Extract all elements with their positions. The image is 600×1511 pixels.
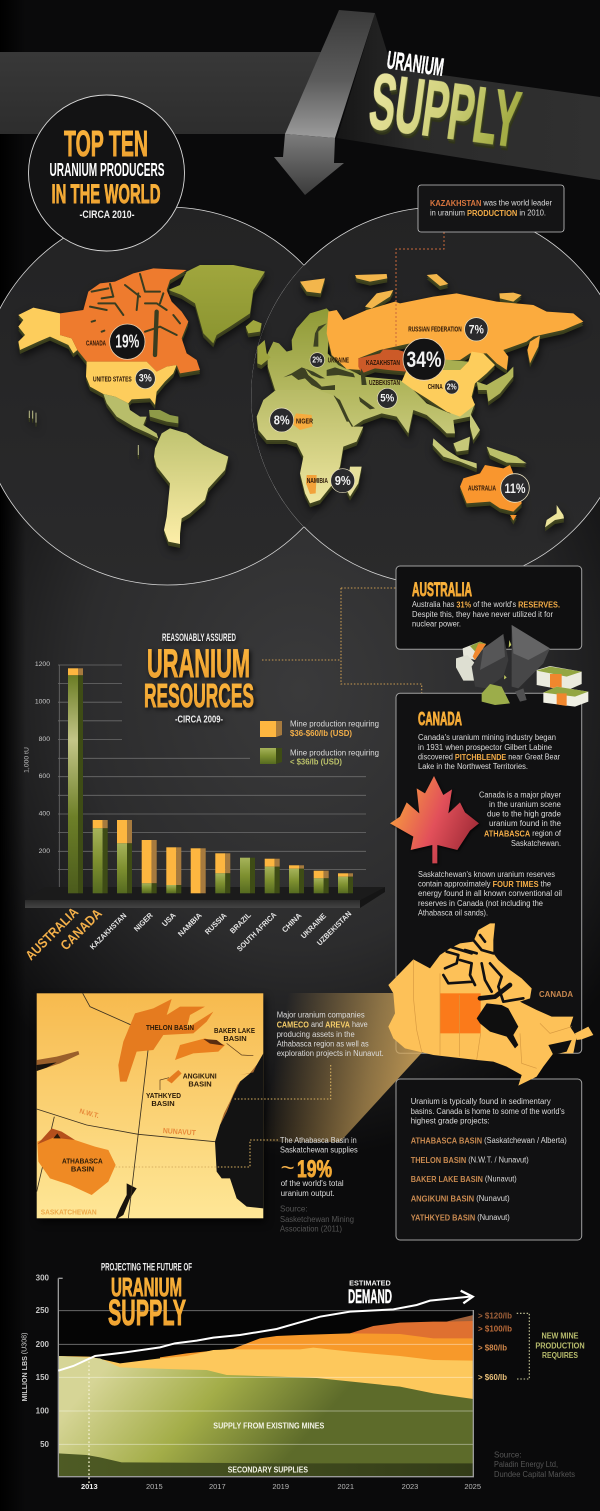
canada mainland and arctic xyxy=(388,923,577,1086)
stat: kazakhstan 34%: 34% xyxy=(406,347,442,372)
panel: canada: CANADA xyxy=(418,709,462,729)
callout: athabasca supplies 19 percent xyxy=(280,1136,358,1198)
yathkyed leader xyxy=(160,1078,169,1090)
text: companies in the athabasca region: producing assets in the xyxy=(277,1030,355,1039)
source: paladin and dundee xyxy=(494,1450,575,1479)
band: over 60 dollars xyxy=(58,1348,473,1477)
source: saskatchewan mining association xyxy=(280,1204,354,1234)
south america xyxy=(154,428,228,544)
basin: angikuni xyxy=(167,1070,182,1083)
x axis labels: 2025 xyxy=(464,1482,481,1491)
panel: canada: ATHABASCA region of xyxy=(484,829,562,838)
caribbean islands xyxy=(149,410,178,423)
country labels: SOUTH AFRICA xyxy=(235,910,279,953)
y axis labels: 1200 xyxy=(35,661,50,668)
stat: uzbekistan 5%: 5% xyxy=(380,392,394,404)
price labels xyxy=(478,1312,512,1382)
callout: kazakhstan production leader: in uranium PRODUCTION in 2010. xyxy=(430,208,546,218)
stat: ukraine 2%: 2% xyxy=(312,356,322,364)
bar: canada xyxy=(93,820,108,893)
panel: basins list: highest grade projects: xyxy=(411,1116,490,1126)
panel: basin inset map: BASIN xyxy=(71,1164,94,1174)
canadian arctic channels xyxy=(90,274,180,355)
source: saskatchewan mining association: Source: xyxy=(280,1204,308,1214)
mongolia xyxy=(433,359,468,370)
southeast asia islands xyxy=(433,413,480,468)
hudson bay coast xyxy=(215,1053,263,1208)
panel: canada: in the uranium scene xyxy=(489,800,562,809)
title: uranium supply xyxy=(365,46,525,164)
greenland xyxy=(168,265,265,343)
bracket: new mine production requires: PRODUCTION xyxy=(535,1342,585,1350)
panel: canada: Athabasca oil sands). xyxy=(418,908,488,918)
heading: reasonably assured uranium resources: REASONABLY ASSURED xyxy=(162,632,236,644)
label: estimated demand xyxy=(348,1278,392,1308)
demand line xyxy=(58,1291,473,1371)
text: companies in the athabasca region xyxy=(277,1010,384,1058)
british isles xyxy=(257,340,271,365)
rock xyxy=(472,625,550,702)
label: estimated demand: ESTIMATED xyxy=(349,1278,391,1288)
heading: projecting the future of uranium supply: URANIUM xyxy=(111,1272,182,1302)
panel: canada: discovered PITCHBLENDE near Great Bear xyxy=(418,752,560,762)
text: companies in the athabasca region: exploration projects in Nunavut. xyxy=(277,1049,384,1058)
stat: ukraine 2%: UKRAINE xyxy=(328,356,349,364)
heading: reasonably assured uranium resources: RESOURCES xyxy=(144,677,254,714)
text: companies in the athabasca region: Athabasca region as well as xyxy=(277,1040,369,1048)
bar: australia xyxy=(68,668,83,893)
panel: basins list: ANGIKUNI BASIN (Nunavut) xyxy=(411,1194,510,1203)
bracket: new mine production requires xyxy=(517,1313,585,1379)
money stack left xyxy=(456,642,486,681)
panel: canada: Saskatchewan. xyxy=(511,839,561,848)
legend: under 36 dollars: Mine production requiring xyxy=(290,748,379,758)
stat: australia 11%: 11% xyxy=(504,480,526,496)
bar: south africa xyxy=(265,859,280,893)
russian federation xyxy=(327,293,583,370)
bracket: new mine production requires: REQUIRES xyxy=(542,1351,579,1360)
panel: canada: Canada is a major player xyxy=(479,790,561,800)
stat: namibia 9% xyxy=(307,469,355,493)
y axis labels xyxy=(36,1274,50,1449)
hawaii xyxy=(29,411,138,455)
panel: canada: Saskatchewan's known uranium reserves xyxy=(418,870,555,879)
bracket: new mine production requires: NEW MINE xyxy=(542,1332,579,1340)
stat: australia 11% xyxy=(468,474,529,502)
y axis labels: 1000 xyxy=(35,698,50,706)
source: paladin and dundee: Source: xyxy=(494,1450,522,1460)
stat: uzbekistan 5% xyxy=(369,378,400,408)
y axis labels: 1,000 tU xyxy=(24,747,30,773)
callout: kazakhstan production leader xyxy=(396,185,564,347)
stat: namibia 9%: 9% xyxy=(335,473,351,488)
panel: basins list xyxy=(396,1079,582,1240)
panel: canada: Lake in the Northwest Territories. xyxy=(418,762,528,771)
source: paladin and dundee: Dundee Capital Markets xyxy=(494,1470,575,1479)
price labels: > $120/lb xyxy=(478,1312,512,1320)
band: over 120 dollars xyxy=(447,1315,473,1477)
lakes xyxy=(37,1051,79,1071)
callout: athabasca supplies 19 percent: uranium output. xyxy=(281,1189,335,1198)
area chart: projected uranium supply xyxy=(20,1274,481,1491)
niger xyxy=(292,413,312,430)
panel: australia xyxy=(396,566,582,649)
heading: reasonably assured uranium resources: -CIRCA 2009- xyxy=(175,714,223,726)
country labels: NAMBIA xyxy=(176,910,204,938)
panel: basin inset map: BASIN xyxy=(223,1034,247,1043)
y axis title: MILLION LBS (U308) xyxy=(20,1332,28,1402)
stat: niger 8% xyxy=(270,408,313,432)
map landmasses xyxy=(18,265,583,544)
bar: ukraine xyxy=(314,871,329,893)
badge: top ten producers xyxy=(28,95,184,251)
country labels: CANADA xyxy=(58,906,105,953)
stat: ukraine 2% xyxy=(310,353,349,367)
legend xyxy=(260,720,379,766)
bar: usa xyxy=(166,847,181,893)
country labels: RUSSIA xyxy=(203,911,229,936)
plot background xyxy=(58,1310,473,1477)
new zealand xyxy=(545,505,564,527)
panel: basin inset map: SASKATCHEWAN xyxy=(41,1208,97,1216)
south asia and middle east xyxy=(300,368,475,433)
stat: china 2%: CHINA xyxy=(428,382,443,391)
band: over 100 dollars xyxy=(350,1321,473,1477)
bar: uzbekistan xyxy=(338,873,353,893)
stat: canada 19%: CANADA xyxy=(86,338,106,348)
badge: top ten producers: -CIRCA 2010- xyxy=(80,209,135,221)
country labels: UKRAINE xyxy=(299,911,328,940)
madagascar xyxy=(347,467,362,497)
panel: basin inset map: BASIN xyxy=(151,1099,175,1108)
heading: reasonably assured uranium resources xyxy=(144,632,254,726)
panel: canada: in 1931 when prospector Gilbert Labine xyxy=(418,743,553,752)
panel: australia: AUSTRALIA xyxy=(412,580,472,601)
callout: athabasca supplies 19 percent: ~ xyxy=(281,1155,295,1180)
stat: russian federation 7%: 7% xyxy=(469,322,484,336)
y axis labels: 50 xyxy=(40,1440,50,1449)
source: saskatchewan mining association: Association (2011) xyxy=(280,1224,342,1234)
bar: namibia xyxy=(191,848,206,893)
china xyxy=(402,352,495,417)
icon: uranium rock and money xyxy=(456,625,588,707)
panel: basin inset map: ATHABASCA xyxy=(62,1156,103,1166)
legend: under 36 dollars: < $36/lb (USD) xyxy=(290,758,342,766)
africa xyxy=(257,383,363,503)
canada map xyxy=(388,923,593,1086)
y axis labels: 200 xyxy=(36,1340,50,1349)
country labels: CHINA xyxy=(280,911,304,934)
namibia xyxy=(306,475,317,494)
dotted connectors on inset map xyxy=(115,1065,331,1167)
panel: basins list: ATHABASCA BASIN (Saskatchewan / Alberta) xyxy=(411,1136,567,1145)
stat: kazakhstan 34%: KAZAKHSTAN xyxy=(366,358,400,367)
x axis labels: 2013 xyxy=(81,1482,98,1491)
arctic islands xyxy=(300,274,522,308)
stat: kazakhstan 34% xyxy=(366,338,445,380)
panel: canada: contain approximately FOUR TIMES the xyxy=(418,880,552,888)
arctic channels xyxy=(443,935,523,1002)
bar: niger xyxy=(142,840,157,893)
country labels: KAZAKHSTAN xyxy=(88,911,128,951)
secondary supplies label: SECONDARY SUPPLIES xyxy=(228,1466,309,1474)
europe xyxy=(268,308,362,390)
country labels: USA xyxy=(160,910,178,928)
european seas xyxy=(283,323,375,422)
band: secondary supplies xyxy=(58,1453,473,1477)
newfoundland xyxy=(575,1027,593,1040)
x axis labels: 2023 xyxy=(402,1482,418,1491)
text: companies in the athabasca region: CAMECO and AREVA have xyxy=(277,1020,368,1029)
stat: uzbekistan 5%: UZBEKISTAN xyxy=(369,378,400,387)
band: supply from existing mines xyxy=(58,1356,473,1477)
panel: canada: reserves in Canada (not including the xyxy=(418,899,544,908)
y axis labels: 800 xyxy=(39,736,50,743)
y axis labels: 300 xyxy=(36,1274,50,1282)
panel: basin inset map xyxy=(37,993,263,1220)
y axis labels: 400 xyxy=(39,810,50,818)
panel: basins list: Uranium is typically found in sedimentary xyxy=(411,1097,551,1106)
north america: mexico and central america xyxy=(103,394,158,438)
header ribbon and arrow xyxy=(0,10,600,195)
axes xyxy=(58,1278,473,1477)
stat: china 2%: 2% xyxy=(447,382,457,392)
panel: basin inset map: NUNAVUT xyxy=(163,1126,196,1137)
country labels: BRAZIL xyxy=(228,910,253,935)
x axis labels xyxy=(81,1482,481,1491)
country labels xyxy=(23,904,353,963)
price labels: > $100/lb xyxy=(478,1324,512,1334)
stat: niger 8%: NIGER xyxy=(296,416,313,426)
country labels: AUSTRALIA xyxy=(23,904,81,963)
y axis labels: 200 xyxy=(39,848,50,855)
x axis labels: 2015 xyxy=(146,1482,163,1491)
panel: basins list: YATHKYED BASIN (Nunavut) xyxy=(411,1213,510,1222)
stat: canada 19%: 19% xyxy=(115,332,139,352)
province borders xyxy=(413,960,572,1068)
price labels: > $60/lb xyxy=(478,1373,507,1382)
iceland xyxy=(246,320,262,333)
title: uranium supply: URANIUM xyxy=(385,46,446,82)
panel: basin inset map: YATHKYED xyxy=(146,1091,182,1100)
bar chart: uranium resources by country xyxy=(23,661,385,963)
north america: united states xyxy=(86,362,177,405)
panel: basin inset map: THELON BASIN xyxy=(146,1023,194,1032)
panel: basin inset map: BASIN xyxy=(188,1080,212,1088)
legend: 36 to 60 dollars: Mine production requiring xyxy=(290,720,379,728)
stat: canada 19% xyxy=(86,324,145,359)
hudson bay xyxy=(477,1003,518,1048)
panel: canada: energy found in all known conventional oil xyxy=(418,889,562,898)
label: estimated demand: DEMAND xyxy=(348,1287,392,1308)
stat: russian federation 7%: RUSSIAN FEDERATION xyxy=(408,324,462,334)
icon: maple leaf xyxy=(390,776,479,863)
text: companies in the athabasca region: Major uranium companies xyxy=(277,1010,365,1020)
money stack right xyxy=(537,666,588,707)
2013 marker xyxy=(87,1357,91,1483)
country labels: NIGER xyxy=(132,910,155,933)
x axis labels: 2019 xyxy=(272,1482,289,1491)
bar: russia xyxy=(215,853,230,893)
x axis labels: 2021 xyxy=(337,1482,354,1491)
kazakhstan xyxy=(358,349,410,373)
panel: basins list: BAKER LAKE BASIN (Nunavut) xyxy=(411,1174,517,1184)
source: paladin and dundee: Paladin Energy Ltd, xyxy=(494,1460,558,1469)
new guinea xyxy=(487,447,527,463)
panel: australia: Despite this, they have never utilized it for xyxy=(412,610,553,619)
y axis labels: 150 xyxy=(36,1373,50,1382)
y axis labels: 600 xyxy=(39,773,50,780)
kamchatka xyxy=(527,336,540,363)
stat: namibia 9%: NAMIBIA xyxy=(307,476,328,485)
basin: thelon xyxy=(118,999,213,1082)
basin: athabasca xyxy=(37,1128,116,1195)
grid lines xyxy=(58,1311,473,1444)
badge: top ten producers: IN THE WORLD xyxy=(52,179,160,209)
heading: projecting the future of uranium supply: PROJECTING THE FUTURE OF xyxy=(101,1262,192,1274)
legend: 36 to 60 dollars: $36-$60/lb (USD) xyxy=(290,729,352,738)
y axis labels: 100 xyxy=(36,1406,50,1416)
green ore chunk xyxy=(482,684,510,705)
country labels: UZBEKISTAN xyxy=(315,909,353,947)
basin: baker lake xyxy=(175,1038,253,1060)
chart axis and grid xyxy=(58,665,366,887)
stat: united states 3%: 3% xyxy=(139,373,152,385)
y axis labels xyxy=(24,661,50,855)
panel: australia: nuclear power. xyxy=(412,620,461,628)
label: canada on map: CANADA xyxy=(539,989,573,999)
stat: russian federation 7% xyxy=(408,318,488,341)
bar: china xyxy=(289,865,304,893)
gulf of st lawrence xyxy=(548,1040,572,1055)
callout: athabasca supplies 19 percent: Saskatchewan supplies xyxy=(280,1146,358,1154)
panel: basin inset map: BAKER LAKE xyxy=(214,1026,255,1035)
panel: basin inset map: ANGIKUNI xyxy=(183,1072,217,1080)
bar: kazakhstan xyxy=(117,820,132,893)
band labels: SUPPLY FROM EXISTING MINES xyxy=(213,1422,325,1430)
panel: canada xyxy=(396,693,582,1053)
north america: alaska xyxy=(18,308,77,353)
tasmania xyxy=(510,515,517,521)
heading: projecting the future of uranium supply xyxy=(101,1262,192,1333)
stat: australia 11%: AUSTRALIA xyxy=(468,484,496,492)
legend: under 36 dollars xyxy=(260,748,379,766)
bar: brazil xyxy=(240,858,255,893)
japan and korea xyxy=(477,367,513,402)
badge: top ten producers: TOP TEN xyxy=(64,123,148,164)
callout: athabasca supplies 19 percent: The Athabasca Basin in xyxy=(280,1136,357,1145)
x axis labels: 2017 xyxy=(209,1482,226,1491)
stat: china 2% xyxy=(428,380,459,394)
world map lobes xyxy=(0,207,600,585)
y axis labels: 250 xyxy=(36,1306,50,1315)
panel: australia: Australia has 31% of the world's RESERVES. xyxy=(412,600,560,609)
stat: united states 3%: UNITED STATES xyxy=(93,374,132,384)
north america: canada xyxy=(60,268,200,373)
legend: 36 to 60 dollars xyxy=(260,720,379,738)
panel: canada: due to the high grade xyxy=(487,810,562,818)
badge: top ten producers: URANIUM PRODUCERS xyxy=(50,160,164,180)
callout: athabasca supplies 19 percent: 19% xyxy=(297,1156,332,1183)
panel: basin inset map: N.W.T. xyxy=(78,1108,100,1120)
panel: basins list: basins. Canada is home to some of the world's xyxy=(411,1107,565,1116)
dotted connectors to australia and canada boxes xyxy=(262,588,422,707)
panel: basins list: THELON BASIN (N.W.T. / Nunavut) xyxy=(411,1156,529,1164)
territory borders xyxy=(37,993,215,1218)
price labels: > $80/lb xyxy=(478,1344,507,1352)
source: saskatchewan mining association: Sasketchewan Mining xyxy=(280,1215,354,1224)
callout: athabasca supplies 19 percent: of the world's total xyxy=(281,1179,344,1188)
chart platform xyxy=(25,887,385,908)
callout: kazakhstan production leader: KAZAKHSTAN was the world leader xyxy=(430,198,552,208)
panel: canada: uranium found in the xyxy=(489,819,562,828)
golden beam linking map to inset xyxy=(264,993,440,1142)
band: over 80 dollars xyxy=(160,1333,473,1477)
stat: united states 3% xyxy=(93,369,155,389)
saskatchewan highlight xyxy=(440,993,481,1033)
heading: reasonably assured uranium resources: URANIUM xyxy=(147,642,250,686)
stat: niger 8%: 8% xyxy=(274,412,290,428)
heading: projecting the future of uranium supply: SUPPLY xyxy=(108,1292,186,1333)
panel: canada: Canada's uranium mining industry began xyxy=(418,733,556,742)
australia xyxy=(460,465,522,512)
